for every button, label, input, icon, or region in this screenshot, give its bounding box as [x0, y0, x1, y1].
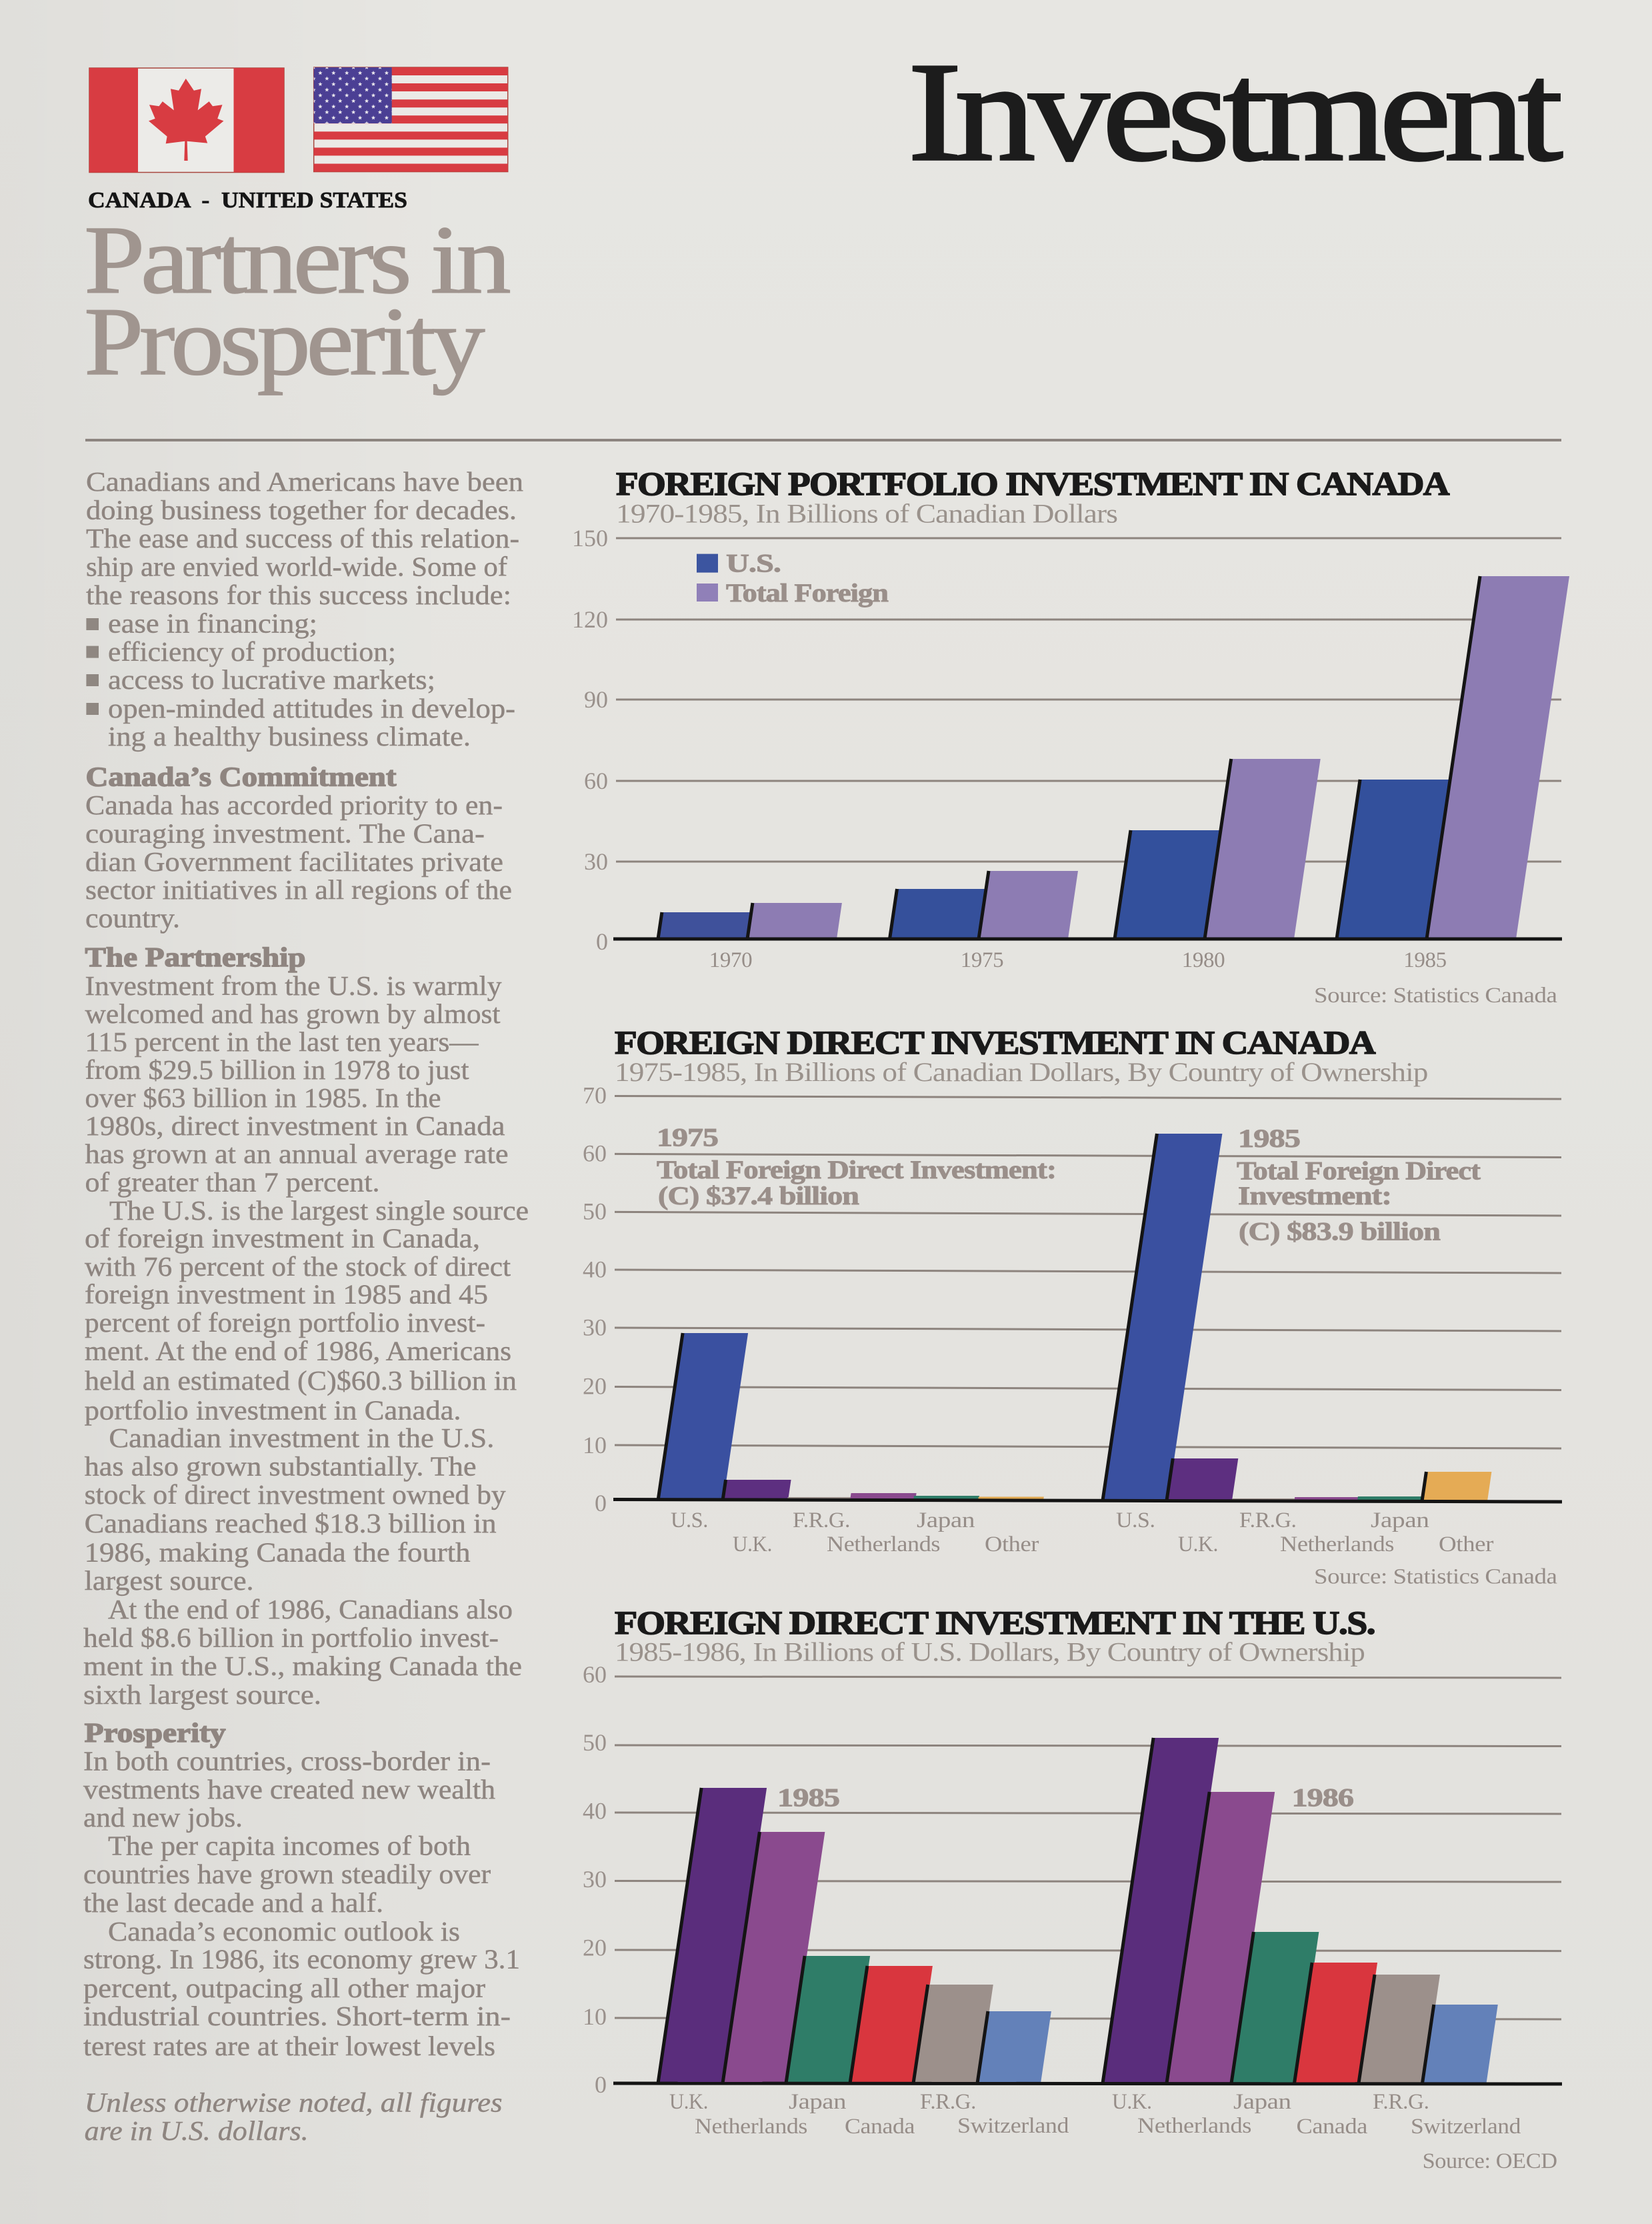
chart subtitle: 1985-1986, In Billions of U.S. Dollars, By Country of Ownership [615, 1636, 1365, 1667]
x axis labels: 1975: Other [985, 1532, 1039, 1556]
text block: Canada's Commitment: country. [85, 903, 180, 934]
text block: Prosperity: percent, outpacing all other major [83, 1973, 485, 2003]
note: currency: are in U.S. dollars. [85, 2115, 309, 2146]
bullet list: reasons for success: ease in financing; [108, 608, 317, 639]
x axis labels: 1975 [671, 1508, 1039, 1556]
text block: introduction: Canadians and Americans have been [86, 466, 523, 497]
text block: Prosperity: the last decade and a half. [83, 1887, 383, 1918]
text block: The Partnership: ment. At the end of 1986, Americans [85, 1336, 511, 1366]
text block: The Partnership: 1986, making Canada the fourth [85, 1536, 471, 1567]
panel: foreign portfolio investment in Canada [572, 465, 1569, 1008]
text block: Canada's Commitment: dian Government facilitates private [85, 846, 503, 877]
panel: foreign direct investment in the U.S. [583, 1604, 1562, 2173]
bars: 1985 [1337, 576, 1569, 939]
text block: The Partnership: percent of foreign portfolio invest- [85, 1307, 485, 1338]
bars: 1975 [889, 871, 1078, 939]
x axis labels: 1985 [669, 2090, 1069, 2139]
x axis labels: 1985: Netherlands [1280, 1532, 1394, 1556]
y axis labels: 70 [583, 1082, 607, 1109]
text block: The Partnership: portfolio investment in Canada. [85, 1395, 461, 1426]
text block: Prosperity: countries have grown steadily over [83, 1859, 491, 1889]
x axis labels: 1975: U.S. [671, 1508, 708, 1532]
x axis labels: 1986: U.K. [1112, 2090, 1152, 2114]
heading: Prosperity: Prosperity [85, 1717, 226, 1748]
bars: 1986 by country [1103, 1738, 1498, 2083]
annotation: 1975 total [657, 1124, 1056, 1210]
annotation: 1985 total: (C) $83.9 billion [1239, 1218, 1441, 1246]
text block: Prosperity: strong. In 1986, its economy grew 3.1 [83, 1944, 520, 1975]
text block: The Partnership: 1980s, direct investment in Canada [85, 1110, 505, 1141]
bullet list: reasons for success: open-minded attitudes in develop- [108, 693, 515, 724]
text block: The Partnership [83, 970, 529, 1710]
text block: introduction: doing business together for decades. [86, 495, 517, 525]
source: Source: OECD [1423, 2149, 1557, 2173]
x axis labels: 1985: Canada [845, 2115, 915, 2139]
bullet list: reasons for success [86, 608, 515, 752]
y axis labels: 30 [583, 1314, 607, 1341]
y axis labels: 50 [583, 1729, 607, 1756]
chart heading: FOREIGN DIRECT INVESTMENT IN CANADA [615, 1024, 1376, 1061]
text block: The Partnership: of greater than 7 percent. [85, 1167, 380, 1198]
chart heading: FOREIGN DIRECT INVESTMENT IN THE U.S. [615, 1604, 1375, 1641]
bullet list: reasons for success: access to lucrative markets; [108, 664, 435, 695]
text block: The Partnership: sixth largest source. [83, 1679, 321, 1710]
y axis labels: 90 [584, 686, 608, 713]
x axis labels: 1986: Netherlands [1137, 2114, 1251, 2138]
text block: The Partnership: with 76 percent of the stock of direct [85, 1251, 511, 1282]
heading: The Partnership: The Partnership [85, 942, 305, 972]
annotation: 1975 total: Total Foreign Direct Investment: [657, 1156, 1056, 1184]
text block: The Partnership: held $8.6 billion in portfolio invest- [83, 1622, 499, 1653]
annotation: 1975 total: 1975 [657, 1124, 718, 1152]
x axis labels: 1975: Japan [917, 1508, 975, 1532]
text block: The Partnership: of foreign investment in Canada, [85, 1223, 480, 1254]
bars: 1970 [658, 903, 842, 939]
bars: 1975 by country [658, 1333, 1044, 1500]
y axis labels: 50 [583, 1198, 607, 1225]
y axis labels: 40 [583, 1798, 607, 1825]
text block: The Partnership: from $29.5 billion in 1978 to just [85, 1054, 469, 1085]
text block: The Partnership: 115 percent in the last ten years— [85, 1026, 479, 1057]
text block: The Partnership: has also grown substantially. The [85, 1451, 477, 1482]
text block: Canada's Commitment: Canada has accorded priority to en- [85, 790, 503, 820]
annotation: 1986: 1986 [1292, 1784, 1353, 1813]
x axis labels: 1985: U.K. [1178, 1532, 1218, 1556]
text block: The Partnership: has grown at an annual average rate [85, 1138, 508, 1169]
text block: introduction: ship are envied world-wide. Some of [86, 551, 507, 582]
x axis labels: 1985: U.S. [1116, 1508, 1155, 1532]
y axis labels: 30 [584, 848, 608, 875]
y axis labels [583, 1661, 607, 2098]
text block: Canada's Commitment [85, 790, 512, 934]
text block: Prosperity: vestments have created new wealth [83, 1774, 495, 1805]
y axis labels: 20 [583, 1373, 607, 1400]
flag: Canada [89, 68, 284, 172]
text block: The Partnership: The U.S. is the largest single source [109, 1195, 529, 1226]
x axis labels: 1986: F.R.G. [1373, 2090, 1429, 2114]
text block: Prosperity [83, 1746, 520, 2061]
x axis labels: 1986 [1112, 2090, 1521, 2139]
text block: The Partnership: ment in the U.S., making Canada the [83, 1650, 522, 1681]
x axis labels: 1975 [961, 948, 1003, 972]
bars: 1985 by country [1103, 1134, 1491, 1501]
panel: foreign direct investment in Canada [583, 1024, 1562, 1589]
annotation: 1975 total: (C) $37.4 billion [658, 1182, 859, 1210]
flag: United States [314, 67, 508, 172]
x axis labels: 1985: Netherlands [695, 2115, 807, 2139]
text block: The Partnership: held an estimated (C)$60.3 billion in [85, 1365, 517, 1396]
y axis labels: 60 [583, 1661, 607, 1688]
annotation: 1985 total: 1985 [1238, 1124, 1300, 1153]
note: currency: Unless otherwise noted, all figures [85, 2087, 503, 2118]
text block: introduction [86, 466, 523, 610]
x axis labels: 1970 [709, 948, 752, 972]
heading: Canada's Commitment: Canada’s Commitment [85, 762, 397, 792]
x axis labels: 1985 [1403, 948, 1447, 972]
text block: The Partnership: stock of direct investment owned by [85, 1479, 506, 1510]
chart subtitle: 1970-1985, In Billions of Canadian Dollars [616, 498, 1117, 528]
text block: introduction: The ease and success of this relation- [86, 523, 519, 553]
y axis labels: 10 [583, 2003, 607, 2030]
text block: The Partnership: over $63 billion in 1985. In the [85, 1082, 441, 1113]
bullet list: reasons for success: efficiency of production; [108, 636, 396, 667]
x axis labels: 1980 [1182, 948, 1225, 972]
x axis labels: 1985: Japan [1371, 1508, 1429, 1532]
annotation: 1985: 1985 [777, 1784, 839, 1813]
x axis labels: 1975: Netherlands [827, 1532, 940, 1556]
y axis labels [583, 1082, 607, 1516]
y axis labels: 60 [583, 1140, 607, 1167]
bars: 1985 by country [658, 1788, 1051, 2083]
text block: The Partnership: At the end of 1986, Canadians also [108, 1594, 513, 1624]
x axis labels: 1975: U.K. [733, 1532, 772, 1556]
x axis labels: 1985: F.R.G. [1239, 1508, 1296, 1532]
eyebrow: Canada - United States: CANADA - UNITED STATES [88, 188, 407, 213]
chart heading: FOREIGN PORTFOLIO INVESTMENT IN CANADA [616, 465, 1450, 502]
x axis labels: 1975: F.R.G. [793, 1508, 850, 1532]
y axis labels: 60 [584, 768, 608, 794]
heading: Partners in Prosperity: Prosperity [84, 287, 485, 395]
text block: Canada's Commitment: sector initiatives in all regions of the [85, 874, 512, 905]
text block: Prosperity: The per capita incomes of both [108, 1831, 471, 1861]
annotation: 1985 total: Total Foreign Direct [1237, 1157, 1481, 1186]
x axis labels: 1985: Switzerland [957, 2114, 1069, 2138]
heading: Partners in Prosperity [84, 206, 510, 395]
chart subtitle: 1975-1985, In Billions of Canadian Dollars, By Country of Ownership [615, 1057, 1428, 1087]
y axis labels: 40 [583, 1256, 607, 1283]
source: Source: Statistics Canada [1314, 984, 1557, 1008]
x axis labels: 1986: Canada [1296, 2115, 1368, 2139]
text block: The Partnership: Canadians reached $18.3 billion in [85, 1508, 497, 1538]
heading: Partners in Prosperity: Partners in [84, 206, 510, 314]
x axis labels: 1985 [1116, 1508, 1493, 1556]
text block: The Partnership: Canadian investment in the U.S. [109, 1422, 494, 1453]
y axis labels: 150 [572, 525, 608, 551]
text block: Prosperity: industrial countries. Short-term in- [83, 2001, 511, 2031]
text block: Prosperity: and new jobs. [83, 1802, 243, 1833]
text block: The Partnership: foreign investment in 1985 and 45 [85, 1279, 488, 1310]
x axis labels: 1985: Japan [789, 2090, 846, 2114]
text block: Prosperity: In both countries, cross-border in- [83, 1746, 491, 1777]
legend: Total Foreign [726, 579, 889, 608]
y axis labels: 0 [595, 2071, 607, 2098]
x axis labels: 1986: Switzerland [1411, 2115, 1521, 2139]
y axis labels: 0 [596, 928, 608, 955]
source: Source: Statistics Canada [1314, 1565, 1557, 1589]
bullet list: reasons for success: ing a healthy business climate. [108, 721, 471, 752]
x axis labels [709, 948, 1447, 972]
text block: Canada's Commitment: couraging investment. The Cana- [85, 818, 485, 849]
x axis labels: 1985: F.R.G. [920, 2090, 976, 2114]
title: Investment: Investment [908, 33, 1562, 190]
y axis labels: 120 [572, 606, 608, 633]
x axis labels: 1986: Japan [1233, 2090, 1291, 2114]
legend: U.S. [726, 549, 781, 578]
legend [697, 549, 889, 608]
y axis labels: 10 [583, 1432, 607, 1458]
y axis labels: 30 [583, 1866, 607, 1893]
text block: The Partnership: welcomed and has grown by almost [85, 998, 501, 1029]
bars: 1980 [1115, 759, 1321, 939]
y axis labels: 20 [583, 1934, 607, 1961]
text block: introduction: the reasons for this success include: [86, 580, 511, 610]
x axis labels: 1985: U.K. [669, 2090, 708, 2114]
text block: The Partnership: largest source. [85, 1565, 254, 1596]
note: currency [85, 2087, 503, 2146]
annotation: 1985 total: Investment: [1238, 1182, 1391, 1210]
text block: Prosperity: terest rates are at their lowest levels [83, 2031, 495, 2061]
text block: Prosperity: Canada’s economic outlook is [108, 1916, 460, 1947]
x axis labels: 1985: Other [1439, 1532, 1493, 1556]
annotation: 1985 total [1237, 1124, 1481, 1246]
text block: The Partnership: Investment from the U.S. is warmly [85, 970, 502, 1001]
y axis labels: 0 [595, 1490, 607, 1516]
y axis labels [572, 525, 608, 955]
